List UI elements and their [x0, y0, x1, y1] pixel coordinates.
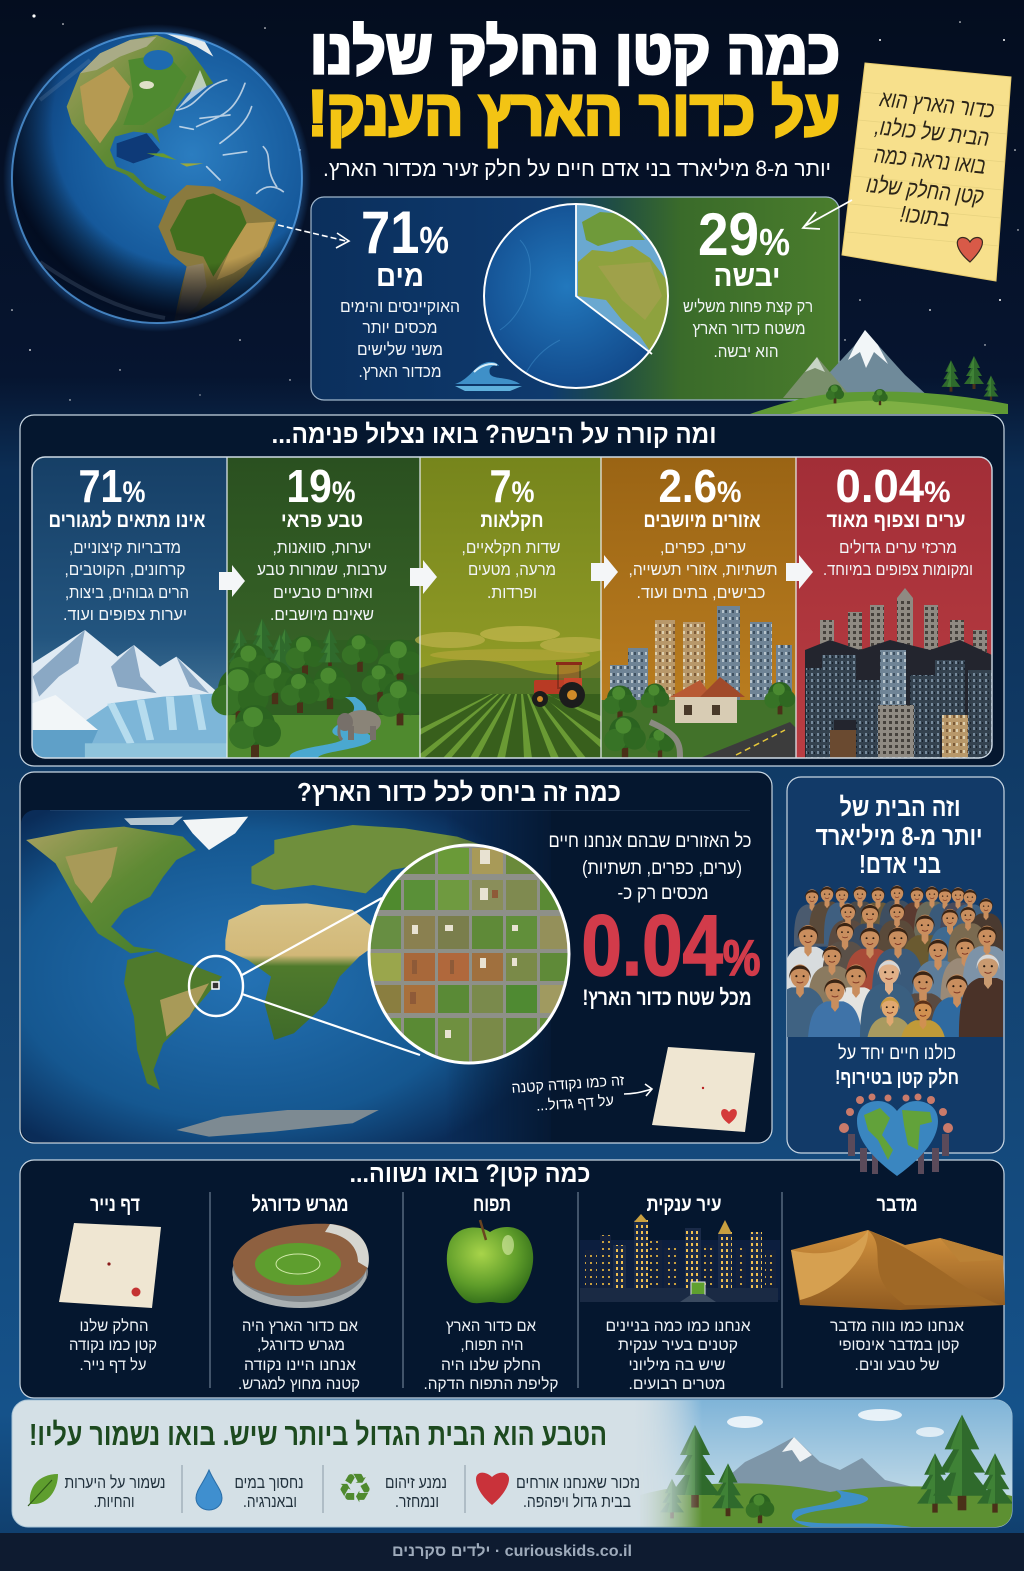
icon: paper with dot	[59, 1223, 161, 1308]
tip: recycle: נמנע זיהום	[385, 1473, 447, 1492]
tip: recycle: ונמחזר.	[395, 1492, 439, 1511]
text: living together: כולנו חיים יחד על	[838, 1043, 956, 1064]
column: stadium: מגרש כדורגל,	[257, 1336, 345, 1354]
tip: water: נחסוך במים	[234, 1473, 304, 1492]
stat: 29 percent land: יבשה	[714, 260, 780, 293]
icon: leaf	[28, 1474, 58, 1506]
column: giant city: עיר ענקית	[646, 1193, 722, 1216]
label text: 19: טבע פראי	[281, 509, 363, 532]
column: desert: מדבר	[876, 1193, 918, 1216]
starfield	[11, 14, 1019, 401]
icon: heart shaped earth with people	[839, 1094, 953, 1176]
icon: apple	[447, 1220, 533, 1303]
stat: 29 percent land: רק קצת פחות משליש	[683, 297, 813, 316]
earth globe	[3, 24, 311, 332]
arrow: note to land	[803, 200, 852, 229]
world map	[21, 810, 750, 1142]
stat: 71 percent water: האוקיינסים והימים	[340, 297, 460, 316]
label text: 19	[257, 460, 387, 624]
label text: 71: הרים גבוהים, ביצות,	[65, 583, 189, 602]
tip: guests: נזכור שאנחנו אורחים	[516, 1473, 640, 1492]
callout: like a dot	[511, 1072, 652, 1115]
heading: כמה קטן? בואו נשווה...	[350, 1160, 590, 1188]
note text: כדור הארץ הוא	[878, 85, 996, 123]
label text: 19: שאינם מיושבים.	[270, 605, 374, 624]
column: stadium: אם כדור הארץ היה	[242, 1318, 358, 1335]
tip: recycle	[337, 1466, 447, 1512]
column: paper: קטן כמו נקודה	[69, 1337, 157, 1354]
footer	[0, 1533, 1024, 1571]
tip: forests	[28, 1473, 166, 1511]
label text: 2.6: תשתיות, אזורי תעשייה,	[628, 560, 778, 579]
magnifier: settled land grid	[369, 845, 571, 1064]
label text: 2.6	[628, 460, 778, 602]
column: desert: אנחנו כמו נווה מדבר	[830, 1318, 964, 1335]
column: agriculture 7	[415, 457, 610, 758]
paper with dot	[652, 1047, 755, 1132]
label text: 7: ופרדות.	[487, 583, 537, 602]
heading: בני אדם!	[859, 849, 941, 879]
text: coverage statement: מכסים רק כ-	[618, 883, 708, 904]
stat: 71 percent water: מכסים יותר	[362, 318, 438, 337]
text: of the whole earth: מכל שטח כדור הארץ!	[582, 985, 752, 1010]
pie chart: 71 water 29 land	[484, 204, 668, 388]
stat: 71 percent water: מכדור הארץ.	[358, 362, 442, 381]
label text: 7: שדות חקלאיים,	[462, 538, 560, 557]
label text: 19: ואזורים טבעיים	[273, 583, 373, 602]
column: stadium: קטנה מחוץ למגרש.	[238, 1375, 360, 1393]
heading	[816, 792, 982, 879]
tip: forests: נשמור על היערות	[64, 1473, 166, 1492]
stat: 71 percent water: 71%	[361, 199, 449, 266]
tip: guests	[476, 1473, 640, 1511]
label text: 0.04: מרכזי ערים גדולים	[839, 538, 957, 557]
zoom lines	[242, 898, 420, 1055]
title	[308, 18, 840, 149]
label text: 2.6: כבישים, בתים ועוד.	[636, 583, 766, 602]
banner: protect nature	[12, 1400, 1020, 1530]
buildings	[610, 606, 792, 700]
column: giant city: אנחנו כמו כמה בניינים	[606, 1318, 750, 1335]
icon: heart	[957, 238, 982, 262]
column: apple: החלק שלנו היה	[441, 1356, 541, 1374]
label text: 19: 19%	[286, 460, 356, 512]
tip: guests: בבית גדול ויפהפה.	[523, 1492, 631, 1511]
column: apple: אם כדור הארץ	[446, 1318, 536, 1335]
column: apple: קליפת התפוח הדקה.	[424, 1375, 558, 1393]
stat: 71 percent water: משני שלישים	[357, 340, 443, 359]
column: apple: תפוח	[473, 1193, 511, 1216]
stat: 29 percent land: משטח כדור הארץ	[692, 319, 806, 338]
column: paper: החלק שלנו	[80, 1317, 148, 1335]
column: wild nature 19	[211, 457, 422, 759]
label text: 7	[462, 460, 560, 602]
callout: like a dot: זה כמו נקודה קטנה	[511, 1072, 625, 1097]
label text: 7: 7%	[490, 460, 534, 512]
stat: 71 percent water	[340, 199, 460, 381]
column: giant city: מטרים רבועים.	[628, 1376, 726, 1393]
icon: stadium	[232, 1224, 369, 1308]
icon: north america	[67, 35, 213, 200]
label text: 2.6: אזורים מיושבים	[644, 509, 760, 532]
heading: ומה קורה על היבשה? בואו נצלול פנימה...	[272, 419, 716, 449]
text: living together	[835, 1043, 959, 1089]
icon: wave	[455, 362, 522, 391]
illustration: crowd of people	[787, 885, 1003, 1037]
house	[670, 677, 745, 723]
icon: recycle: ♻	[337, 1466, 373, 1512]
column: giant city: שיש בה מיליוני	[628, 1356, 726, 1374]
column: desert: של טבע ונים.	[854, 1356, 940, 1374]
subtitle: יותר מ-8 מיליארד בני אדם חיים על חלק זעיר מכדור הארץ.	[323, 156, 831, 181]
label text: 0.04: ומקומות צפופים במיוחד.	[823, 560, 973, 579]
label text: 7: מרעה, מטעים	[468, 560, 556, 579]
arrows between columns	[219, 555, 813, 597]
landscape	[630, 1400, 1020, 1530]
label text: 71: מדבריות קיצוניים,	[69, 538, 181, 557]
stat: 71 percent water: מים	[376, 260, 424, 293]
panel: home of 8 billion	[786, 776, 1005, 1154]
tip: forests: והחיות.	[94, 1492, 134, 1511]
label text: 0.04	[823, 460, 973, 579]
label text: 71	[48, 460, 206, 624]
heading: כמה זה ביחס לכל כדור הארץ?	[297, 777, 621, 807]
footer: curiouskids.co.il · ילדים סקרנים	[392, 1542, 632, 1560]
column: stadium: מגרש כדורגל	[252, 1193, 348, 1216]
column: apple	[424, 1193, 558, 1393]
label text: 71: יערות צפופים ועוד.	[63, 605, 187, 624]
panel: comparisons	[20, 1160, 1005, 1398]
column: desert: קטן במדבר אינסופי	[838, 1337, 960, 1354]
icon: tractor	[532, 662, 585, 708]
label text: 2.6: ערים, כפרים,	[660, 538, 746, 557]
stat: 29 percent land: 29%	[698, 201, 790, 268]
icon: water drop	[196, 1470, 222, 1510]
sticky note	[842, 63, 1011, 281]
column: desert	[791, 1193, 1005, 1374]
note text	[865, 85, 996, 232]
panel: land use breakdown	[20, 415, 1004, 766]
title: כמה קטן החלק שלנו	[310, 18, 840, 87]
column: giant city	[580, 1193, 780, 1393]
note text: הבית של כולנו,	[873, 113, 991, 151]
note text: בתוכו!	[899, 200, 951, 232]
text: living together: חלק קטן בטירוף!	[835, 1067, 959, 1089]
label text: 0.04: ערים וצפוף מאוד	[826, 509, 966, 532]
big number 0.04 percent: 0.04%	[582, 898, 760, 994]
panel: relative to whole earth	[20, 772, 772, 1143]
column: giant city: קטנים בעיר ענקית	[618, 1337, 738, 1354]
small locator circle	[189, 956, 243, 1016]
heading: הטבע הוא הבית הגדול ביותר שיש. בואו נשמור עליו!	[29, 1417, 607, 1452]
panel: water and land split	[311, 197, 839, 400]
column: very dense cities 0.04	[796, 457, 992, 758]
label text: 71: 71%	[78, 460, 146, 512]
column: unsuitable 71	[32, 457, 229, 759]
label text: 0.04: 0.04%	[836, 460, 950, 512]
illustration: mountain and hill	[750, 330, 1008, 414]
label text: 71: קרחונים, הקוטבים,	[64, 560, 186, 579]
stat: 29 percent land: הוא יבשה.	[714, 342, 778, 361]
heading: יותר מ-8 מיליארד	[816, 821, 982, 851]
column: stadium	[232, 1193, 369, 1393]
label text: 2.6: 2.6%	[658, 460, 742, 512]
illustration: night city	[580, 1214, 780, 1302]
tip: water: ובאנרגיה.	[243, 1492, 297, 1511]
label text: 19: יערות, סוואנות,	[272, 538, 372, 557]
column: paper	[59, 1193, 161, 1374]
label text: 7: חקלאות	[480, 509, 544, 532]
note text: קטן החלק שלנו	[865, 171, 985, 209]
tip: water	[196, 1470, 304, 1511]
column: stadium: אנחנו היינו נקודה	[244, 1357, 356, 1374]
icon: south america	[158, 185, 277, 325]
callout: like a dot: על דף גדול...	[536, 1092, 615, 1115]
text: coverage statement: (ערים, כפרים, תשתיות)	[582, 858, 742, 879]
label text: 71: אינו מתאים למגורים	[48, 509, 206, 532]
clouds	[177, 80, 283, 193]
column: apple: היה תפוח,	[460, 1337, 524, 1354]
note text: בואו נראה כמה	[873, 141, 987, 179]
title: על כדור הארץ הענק!	[308, 77, 840, 149]
icon: heart	[476, 1473, 509, 1505]
text: coverage statement: כל האזורים שבהם אנחנו חיים	[548, 831, 752, 852]
column: settled areas 2.6	[601, 457, 796, 759]
column: paper: דף נייר	[90, 1193, 140, 1216]
text: coverage statement	[548, 831, 752, 904]
label text: 19: ערבות, שמורות טבע	[257, 560, 387, 579]
heading: וזה הבית של	[840, 792, 960, 822]
columns group	[32, 457, 992, 759]
arrow: globe to water	[278, 225, 349, 248]
illustration: dunes	[791, 1230, 1005, 1310]
column: paper: על דף נייר.	[80, 1356, 146, 1374]
stat: 29 percent land	[683, 201, 813, 361]
dense buildings	[805, 588, 992, 758]
column separators	[227, 457, 796, 758]
